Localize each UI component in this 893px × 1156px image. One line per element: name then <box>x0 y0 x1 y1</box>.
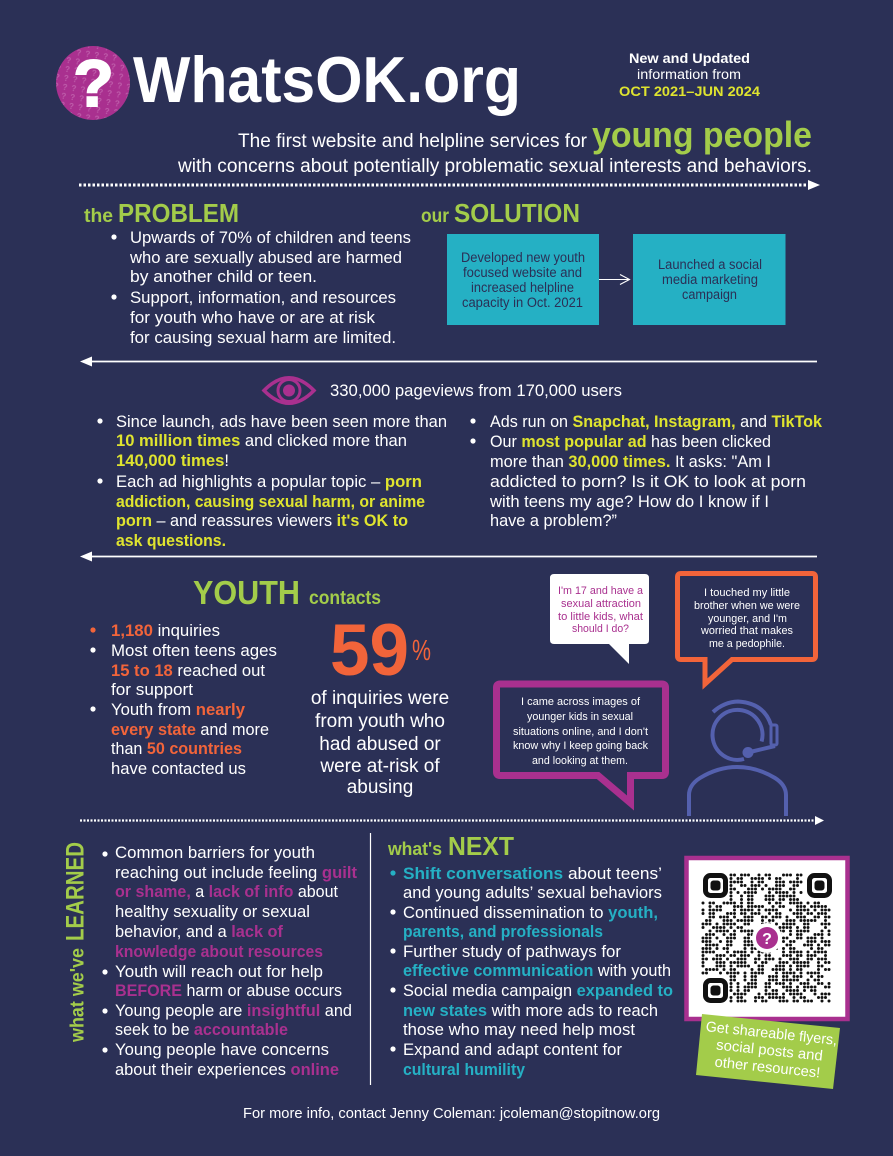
ads list: right: have a problem?” <box>490 512 617 530</box>
stat: 59 percent: 59 <box>330 610 409 691</box>
callout: purple speech bubble: younger kids in sexual <box>527 711 633 723</box>
box: new website <box>447 234 599 325</box>
footer contact: For more info, contact Jenny Coleman: jcoleman@stopitnow.org <box>243 1106 660 1122</box>
ads list: right: Our most popular ad has been clicked <box>490 433 771 451</box>
next list: Shift conversations about teens’ <box>403 865 662 883</box>
ads list: left: porn – and reassures viewers it's OK to <box>116 512 408 530</box>
next list <box>390 865 673 1079</box>
callout: orange speech bubble: younger, and I'm <box>708 613 787 625</box>
callout: white speech bubble: to little kids, what <box>558 611 643 623</box>
arrow: solution step <box>599 274 630 284</box>
callout: shareable resources tag: Get shareable flyers, <box>705 1019 838 1049</box>
callout: purple speech bubble: situations online, and I don't <box>513 726 648 738</box>
box: new website: focused website and <box>463 265 582 280</box>
next list: and young adults’ sexual behaviors <box>403 884 662 902</box>
callout: orange speech bubble: me a pedophile. <box>709 638 785 650</box>
youth list: for support <box>111 681 193 699</box>
learned list: Youth will reach out for help <box>115 963 323 981</box>
youth list: than 50 countries <box>111 740 242 758</box>
ads list: right: with teens my age? How do I know if I <box>489 493 769 511</box>
youth list: have contacted us <box>111 760 246 778</box>
subtitle <box>177 114 812 177</box>
arrow: divider left <box>80 356 817 366</box>
heading: what we've learned: LEARNED <box>62 842 90 941</box>
ads list: right: addicted to porn? Is it OK to look at porn <box>490 473 806 491</box>
heading: the problem: the <box>84 206 113 227</box>
pageviews stat: 330,000 pageviews from 170,000 users <box>330 382 622 400</box>
youth list: Most often teens ages <box>111 642 277 660</box>
callout: white speech bubble <box>550 574 649 664</box>
learned list: BEFORE harm or abuse occurs <box>115 982 342 1000</box>
ads list: right <box>470 413 823 530</box>
next list: new states with more ads to reach <box>403 1002 658 1020</box>
stat: 59 percent: had abused or <box>319 734 441 755</box>
stat: 59 percent <box>311 610 449 798</box>
box: social campaign: media marketing <box>662 272 758 287</box>
problem bullets: who are sexually abused are harmed <box>129 248 402 267</box>
problem bullets: Upwards of 70% of children and teens <box>130 228 411 247</box>
problem bullets <box>111 228 411 347</box>
subtitle: The first website and helpline services for <box>238 130 587 152</box>
title: WhatsOK.org <box>133 43 521 116</box>
learned list: or shame, a lack of info about <box>115 883 338 901</box>
ads list: right: Ads run on Snapchat, Instagram, and TikTok <box>490 413 823 431</box>
stat: 59 percent: were at-risk of <box>319 756 440 777</box>
arrow: dotted divider right <box>79 180 820 190</box>
heading: what we've learned: what we've <box>68 948 88 1043</box>
youth list: 15 to 18 reached out <box>111 662 265 680</box>
arrow: dotted divider right 2 <box>80 816 824 825</box>
heading: what we've learned <box>62 842 90 1043</box>
learned list <box>102 844 358 1079</box>
youth list: Youth from nearly <box>111 701 246 719</box>
callout: orange speech bubble: I touched my little <box>704 587 790 599</box>
problem bullets: Support, information, and resources <box>130 288 396 307</box>
ads list: left: Since launch, ads have been seen more than <box>116 413 447 431</box>
box: new website: Developed new youth <box>461 250 585 265</box>
next list: Continued dissemination to youth, <box>403 904 658 922</box>
QR code: ? <box>762 931 772 948</box>
youth list: 1,180 inquiries <box>111 622 220 640</box>
problem bullets: for causing sexual harm are limited. <box>130 328 396 347</box>
learned list: seek to be accountable <box>115 1021 288 1039</box>
heading: our solution: our <box>421 206 450 227</box>
box: new website: increased helpline <box>471 280 574 295</box>
problem bullets: for youth who have or are at risk <box>130 308 376 327</box>
heading: what's next: NEXT <box>448 831 514 861</box>
learned list: healthy sexuality or sexual <box>115 903 310 921</box>
callout: purple speech bubble: know why I keep going back <box>513 740 648 752</box>
callout: orange speech bubble: worried that makes <box>700 625 793 637</box>
callout: shareable resources tag <box>696 1014 840 1089</box>
ads list: left: Each ad highlights a popular topic – porn <box>116 473 422 491</box>
ads list: left: ask questions. <box>116 532 226 550</box>
callout: orange speech bubble <box>678 574 816 684</box>
learned list: reaching out include feeling guilt <box>115 864 358 882</box>
next list: Expand and adapt content for <box>403 1041 623 1059</box>
date note: OCT 2021–JUN 2024 <box>619 84 761 99</box>
problem bullets: by another child or teen. <box>130 267 317 286</box>
callout: white speech bubble: I'm 17 and have a <box>558 585 644 597</box>
ads list: left: 140,000 times! <box>116 452 229 470</box>
box: social campaign <box>633 234 786 325</box>
box: social campaign: Launched a social <box>658 257 762 272</box>
panel: our solution <box>421 198 786 325</box>
heading: what's next: what's <box>387 839 442 859</box>
stat: 59 percent: abusing <box>347 777 413 798</box>
icon: eye <box>264 378 314 403</box>
learned list: about their experiences online <box>115 1061 339 1079</box>
icon: helpline agent <box>689 702 786 816</box>
next list: parents, and professionals <box>403 923 603 941</box>
learned list: Young people are insightful and <box>115 1002 352 1020</box>
arrow: divider left 2 <box>80 552 817 562</box>
next list: cultural humility <box>403 1061 526 1079</box>
panel: the problem <box>84 198 411 347</box>
callout: white speech bubble: should I do? <box>572 623 629 635</box>
icon: question mark logo <box>56 46 130 120</box>
ads list: left: 10 million times and clicked more than <box>116 432 407 450</box>
youth list: every state and more <box>111 721 269 739</box>
heading: what's next <box>387 831 514 861</box>
callout: shareable resources tag: other resources! <box>714 1055 821 1082</box>
callout: shareable resources tag: social posts and <box>715 1037 823 1065</box>
learned list: Common barriers for youth <box>115 844 315 862</box>
subtitle: young people <box>592 114 812 155</box>
ads list: right: more than 30,000 times. It asks: "Am I <box>490 453 771 471</box>
heading: youth contacts: contacts <box>309 588 381 609</box>
subtitle: with concerns about potentially problematic sexual interests and behaviors. <box>177 156 812 177</box>
date note <box>619 51 761 99</box>
heading: our solution: SOLUTION <box>454 198 580 228</box>
next list: those who may need help most <box>403 1021 635 1039</box>
callout: purple speech bubble: I came across images of <box>521 696 641 708</box>
box: new website: capacity in Oct. 2021 <box>462 295 583 310</box>
learned list: knowledge about resources <box>115 943 323 961</box>
youth list <box>90 622 277 778</box>
callout: purple speech bubble <box>496 684 666 803</box>
callout: white speech bubble: sexual attraction <box>561 598 641 610</box>
next list: effective communication with youth <box>403 962 671 980</box>
heading: the problem: PROBLEM <box>118 198 239 228</box>
ads list: left: addiction, causing sexual harm, or anime <box>116 493 425 511</box>
learned list: behavior, and a lack of <box>115 923 283 941</box>
next list: Social media campaign expanded to <box>403 982 673 1000</box>
callout: purple speech bubble: and looking at them. <box>532 755 628 767</box>
callout: orange speech bubble: brother when we were <box>694 600 800 612</box>
next list: Further study of pathways for <box>403 943 622 961</box>
stat: 59 percent: of inquiries were <box>311 688 449 709</box>
stat: 59 percent: % <box>412 635 431 667</box>
heading: youth contacts: YOUTH <box>193 574 300 611</box>
box: social campaign: campaign <box>682 287 737 302</box>
heading: youth contacts <box>193 574 381 611</box>
icon: question mark logo: ? <box>73 46 114 120</box>
date note: information from <box>637 67 741 82</box>
date note: New and Updated <box>629 51 750 66</box>
learned list: Young people have concerns <box>115 1041 329 1059</box>
stat: 59 percent: from youth who <box>315 711 445 732</box>
ads list: left <box>97 413 447 550</box>
QR code <box>686 858 848 1019</box>
